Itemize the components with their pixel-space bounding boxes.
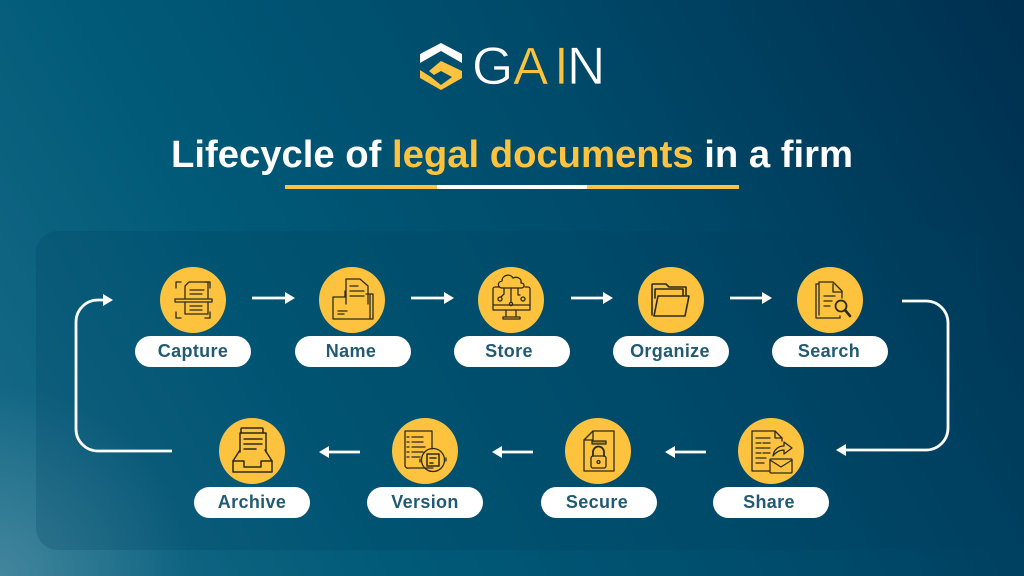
step: Secure [541,418,657,518]
icon: cloud computer [493,275,530,319]
arrow [571,292,613,304]
label: Secure [566,492,628,512]
step: Share [713,418,829,518]
logo wordmark: A [513,37,549,96]
step: Version [367,418,483,518]
arrow [492,446,533,458]
step: Archive [194,418,310,518]
arrow [252,292,295,304]
arrow [730,292,772,304]
step: Organize [613,267,729,367]
panel: process flow [36,231,988,550]
label: Search [798,341,860,361]
label: Capture [158,341,228,361]
label: Store [485,341,533,361]
title: Lifecycle of legal documents in a firm [171,134,853,176]
icon: named folder [333,279,373,319]
logo wordmark: G [472,37,513,96]
label: Organize [630,341,710,361]
step: Store [454,267,570,367]
icon: document scan [175,282,212,318]
label: Name [326,341,376,361]
arrow: connector right [836,301,948,456]
step: Capture [135,267,251,367]
icon: document search [816,282,850,318]
logo wordmark: N [567,37,605,96]
label: Archive [218,492,286,512]
icon: locked document [584,431,614,471]
icon: share document [752,431,792,473]
logo wordmark: I [554,37,569,96]
arrow: connector left [76,294,172,451]
logo: GAIN [420,37,605,96]
title underline [285,185,739,189]
logo mark [420,43,462,90]
arrow [665,446,706,458]
arrow [319,446,360,458]
step: Search [772,267,888,367]
label: Version [391,492,459,512]
label: Share [743,492,795,512]
arrow [411,292,454,304]
icon: archive tray [233,428,272,472]
step: Name [295,267,411,367]
icon: open folder [652,284,689,316]
icon: versioned document [405,431,446,472]
